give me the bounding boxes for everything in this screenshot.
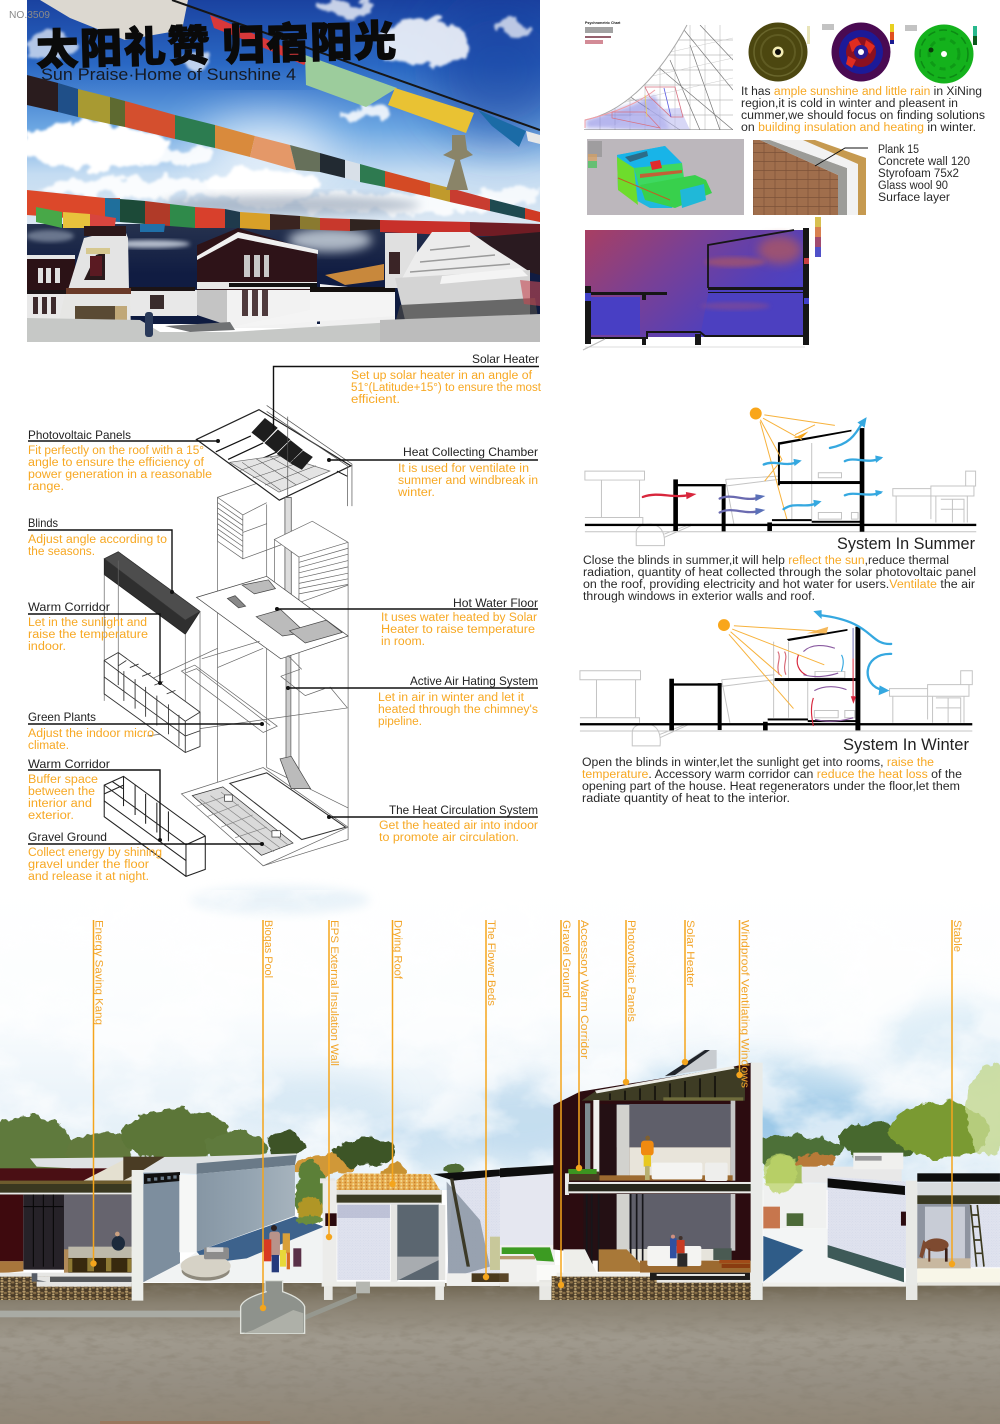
wall layer labels: Plank 15 [878, 144, 919, 156]
label: Heat Collecting Chamber [397, 445, 538, 499]
label: Gravel Ground: Collect energy by shining [28, 847, 162, 859]
label: Green Plants: Adjust the indoor micro [28, 728, 154, 740]
left house floor and gravel [0, 1273, 132, 1300]
section callout: Stable: Stable [951, 920, 963, 952]
label: Warm Corridor lower [28, 757, 110, 822]
ground: soil [0, 1283, 1000, 1424]
neighbouring buildings [585, 443, 976, 546]
wall layer labels: Surface layer [878, 192, 950, 204]
courtyard shadow [197, 1217, 324, 1263]
label: Solar Heater: Solar Heater [472, 352, 539, 366]
stable white pier [906, 1181, 917, 1300]
sun rays [729, 626, 824, 709]
flag band: lower [27, 190, 540, 236]
wall layer labels: Styrofoam 75x2 [878, 168, 959, 180]
roof trusses [582, 1066, 745, 1101]
courtyard green bed [500, 1245, 560, 1283]
courtyard ground [27, 318, 395, 342]
section callout: Energy Saving Kang: Energy Saving Kang [92, 920, 104, 1025]
section callout: EPS External Insulation Wall [326, 920, 340, 1240]
lower room [563, 1194, 752, 1273]
house shell [553, 1063, 752, 1273]
ground floor [181, 756, 348, 866]
chart: psychrometric chart: Psychrometric Chart [585, 21, 621, 25]
label: Warm Corridor lower: Warm Corridor [28, 757, 110, 771]
text block: summer description: on the roof, providing electricity and hot water for users. Ventilate the air [583, 579, 975, 591]
spire [443, 135, 473, 190]
heading: System In Summer: System In Summer [837, 535, 975, 553]
stable footing [763, 1283, 917, 1300]
label: Solar Heater [351, 352, 542, 406]
label: Solar Heater: efficient. [351, 394, 400, 406]
label: The Heat Circulation System: The Heat Circulation System [389, 803, 538, 817]
text block: climate description: cummer,we should focus on finding solutions [741, 110, 985, 122]
label: Photovoltaic Panels: range. [28, 481, 64, 493]
label: Solar Heater: 51°(Latitude+15°) to ensure the most [351, 382, 542, 394]
chart: purple radial temperature diagram [822, 22, 894, 82]
neighbouring buildings [580, 642, 972, 746]
label: Warm Corridor lower: Buffer space [28, 774, 98, 786]
label: Solar Heater: Set up solar heater in an angle of [351, 370, 533, 382]
courtyard floor [144, 1216, 323, 1283]
section callout: Stable [949, 920, 963, 1267]
far wall and plants [763, 1153, 903, 1229]
section callout: Gravel Ground: Gravel Ground [560, 920, 572, 998]
text block: summer description [583, 555, 976, 603]
label: Heat Collecting Chamber: summer and windbreak in [398, 475, 538, 487]
label: Warm Corridor upper: Warm Corridor [28, 600, 110, 614]
small distant flags [325, 264, 384, 285]
label: Green Plants: Green Plants [28, 710, 96, 724]
ladder [971, 1205, 984, 1267]
trough [119, 641, 347, 736]
section callout: Drying Roof: Drying Roof [392, 920, 404, 980]
white party wall [751, 1063, 763, 1300]
label: Heat Collecting Chamber: Heat Collecting Chamber [403, 445, 538, 459]
sofa lower [647, 1246, 701, 1266]
black frieze [144, 1172, 180, 1184]
label: Blinds: Adjust angle according to [28, 534, 167, 546]
textured wall and black band [500, 1165, 555, 1245]
label: Blinds: the seasons. [28, 546, 95, 558]
person upper [641, 1136, 654, 1180]
biogas pool [0, 1281, 370, 1333]
section callout: Photovoltaic Panels [623, 920, 637, 1085]
solar heater [665, 1050, 717, 1077]
upper room [568, 1100, 735, 1181]
air flow arrow heads [813, 610, 890, 704]
panel: energy model of the house [587, 139, 744, 215]
distant trees [0, 1065, 1000, 1230]
label: Blinds [28, 516, 167, 558]
text block: winter description: opening part of the house. Heat regenerators under the floor,let them [582, 781, 960, 793]
sun rays [760, 415, 835, 519]
louvres left [218, 497, 267, 559]
panel: insulated wall construction [753, 140, 868, 215]
flag band: middle [27, 75, 540, 222]
text block: winter description [582, 757, 962, 805]
section callout: Biogas Pool [260, 920, 274, 1311]
label: Photovoltaic Panels: angle to ensure the efficiency of [28, 457, 205, 469]
section drawing: main two-storey house and stable [500, 1050, 1000, 1300]
section callout: Accessory Warm Corridor: Accessory Warm Corridor [578, 920, 590, 1059]
label: Warm Corridor upper: raise the temperature [28, 629, 148, 641]
label: Gravel Ground: gravel under the floor [28, 859, 149, 871]
chart: psychrometric chart [584, 21, 733, 130]
structure [585, 428, 976, 532]
leader lines for axonometric [28, 366, 539, 846]
section callout: EPS External Insulation Wall: EPS External Insulation Wall [328, 920, 340, 1066]
group of people [264, 1225, 301, 1272]
far wall [320, 284, 395, 326]
wall layer labels [878, 144, 970, 204]
label: The Heat Circulation System: Get the heated air into indoor [379, 820, 538, 832]
air flow arrows [820, 615, 891, 698]
heading: System In Winter: System In Winter [843, 736, 969, 754]
section callout: Solar Heater: Solar Heater [684, 920, 696, 987]
floor and gravel [500, 1273, 751, 1300]
section drawing: left house and courtyard [0, 1153, 500, 1333]
stupa [380, 232, 540, 342]
pilgrim [145, 312, 153, 337]
slanted wall and black roof band [433, 1169, 500, 1286]
label: Warm Corridor lower: between the [28, 786, 95, 798]
label: Gravel Ground [28, 830, 162, 883]
label: Green Plants: climate. [28, 740, 69, 752]
label: Warm Corridor upper: indoor. [28, 641, 66, 653]
label: Hot Water Floor [381, 596, 538, 648]
left house upper [0, 1157, 165, 1195]
arrow heads [686, 417, 883, 515]
label: Hot Water Floor: It uses water heated by Solar [381, 612, 537, 624]
label: Gravel Ground: and release it at night. [28, 871, 149, 883]
text block: climate description: on building insulation and heating in winter. [741, 122, 976, 134]
courtyard shadow [763, 1236, 803, 1282]
label: Heat Collecting Chamber: winter. [397, 487, 435, 499]
hot water floor [197, 576, 348, 659]
left house room [0, 1195, 132, 1273]
section callout: Energy Saving Kang [90, 920, 104, 1267]
chimney [285, 497, 291, 764]
label: Warm Corridor lower: exterior. [28, 810, 74, 822]
floor slab [565, 1173, 752, 1195]
label: Warm Corridor upper [28, 600, 148, 653]
text block: climate description: It has ample sunshine and little rain in XiNing [741, 86, 982, 98]
wall layer labels: Concrete wall 120 [878, 156, 970, 168]
text block: winter description: radiate quantity of heat to the interior. [582, 793, 790, 805]
chart: green radial diagram [905, 24, 977, 84]
flag band: top [40, 0, 540, 147]
section callout: Accessory Warm Corridor [576, 920, 590, 1171]
label: The Heat Circulation System: to promote air circulation. [379, 832, 519, 844]
section callout: Photovoltaic Panels: Photovoltaic Panels [625, 920, 637, 1023]
wall layer labels: Glass wool 90 [878, 180, 948, 192]
louvres right [274, 521, 348, 603]
courtyard floor [763, 1228, 908, 1283]
left building [27, 255, 75, 319]
hero photo: prayer flags and Tibetan buildings [20, 0, 570, 342]
wind arrows [643, 421, 881, 513]
label: Blinds: Blinds [28, 516, 58, 530]
text block: summer description: radiation, quantity of heat collected through the solar photovoltaic panel [583, 567, 976, 579]
section callout: Biogas Pool: Biogas Pool [262, 920, 274, 978]
section callout: Solar Heater [682, 920, 696, 1065]
section callout: Gravel Ground [558, 920, 572, 1288]
warm corridor glass upper [104, 652, 200, 752]
label: Active Air Hating System: heated through the chimney's [378, 704, 538, 716]
section callout: Windproof Ventilating Windows: Windproof Ventilating Windows [738, 920, 750, 1089]
white column [179, 1175, 197, 1252]
frame [218, 480, 348, 866]
label: Green Plants [28, 710, 154, 752]
courtyard long wall [197, 1165, 295, 1252]
drying roof building [320, 1173, 445, 1300]
text block: climate description: region,it is cold in winter and pleasent in [741, 98, 958, 110]
label: Gravel Ground: Gravel Ground [28, 830, 107, 844]
sun [750, 408, 762, 419]
table and bench [713, 1248, 750, 1268]
label: Photovoltaic Panels: Fit perfectly on the roof with a 15° [28, 445, 204, 457]
label: Warm Corridor upper: Let in the sunlight and [28, 617, 147, 629]
number tag: NO.3509 [9, 9, 50, 21]
text block: winter description: temperature . Accessory warm corridor can reduce the heat loss of the [582, 769, 962, 781]
blinds box [104, 552, 200, 715]
text block: summer description: Close the blinds in summer,it will help reflect the sun ,reduce thermal [583, 555, 949, 567]
chart: thermal section heat map [583, 217, 821, 350]
watercolour sky [0, 886, 1000, 1190]
section callout: Drying Roof [389, 920, 404, 1187]
circulation loops [778, 646, 853, 726]
white wall [132, 1170, 143, 1301]
sofa upper [652, 1163, 728, 1181]
structure [580, 627, 972, 730]
horse [919, 1238, 949, 1262]
diagram: section in winter [580, 610, 972, 746]
label: Hot Water Floor: Hot Water Floor [453, 596, 538, 610]
diagram: section in summer [585, 408, 976, 546]
label: Active Air Hating System: Let in air in winter and let it [378, 692, 525, 704]
section callout: The Flower Beds [483, 920, 497, 1280]
blue wall [143, 1173, 180, 1282]
roof plate [197, 405, 352, 506]
text block: climate description [741, 86, 985, 134]
warm corridor glass lower [104, 776, 205, 876]
text block: winter description: Open the blinds in winter,let the sunlight get into rooms, raise the [582, 757, 934, 769]
stable wall [828, 1177, 916, 1282]
people lower [670, 1235, 687, 1267]
label: Heat Collecting Chamber: It is used for ventilate in [398, 463, 529, 475]
label: Photovoltaic Panels [28, 428, 212, 493]
label: Warm Corridor lower: interior and [28, 798, 92, 810]
label: Active Air Hating System: pipeline. [378, 716, 422, 728]
title: Chinese brush heading: 太阳礼赞 归宿阳光 [35, 7, 397, 78]
tower [66, 226, 131, 320]
label: Hot Water Floor: in room. [381, 636, 425, 648]
label: The Heat Circulation System [379, 803, 538, 844]
label: Hot Water Floor: Heater to raise temperature [381, 624, 535, 636]
text block: summer description: through windows in exterior walls and roof. [583, 591, 815, 603]
label: Photovoltaic Panels: Photovoltaic Panels [28, 428, 131, 442]
stable roof and room [917, 1173, 1000, 1286]
subtitle: Sun Praise·Home of Sunshine 4 [41, 65, 296, 84]
chart: olive radial sun diagram [748, 22, 810, 82]
diagram: exploded axonometric of the house [104, 405, 352, 876]
label: Active Air Hating System: Active Air Hating System [410, 674, 538, 688]
millstone [181, 1247, 231, 1281]
sun [718, 619, 730, 631]
plants by courtyard [297, 1197, 323, 1224]
courtyard wall frieze [30, 1153, 297, 1174]
label: Active Air Hating System [378, 674, 538, 728]
label: Photovoltaic Panels: power generation in a reasonable [28, 469, 212, 481]
centre building [197, 228, 395, 328]
section callout: The Flower Beds: The Flower Beds [485, 920, 497, 1007]
